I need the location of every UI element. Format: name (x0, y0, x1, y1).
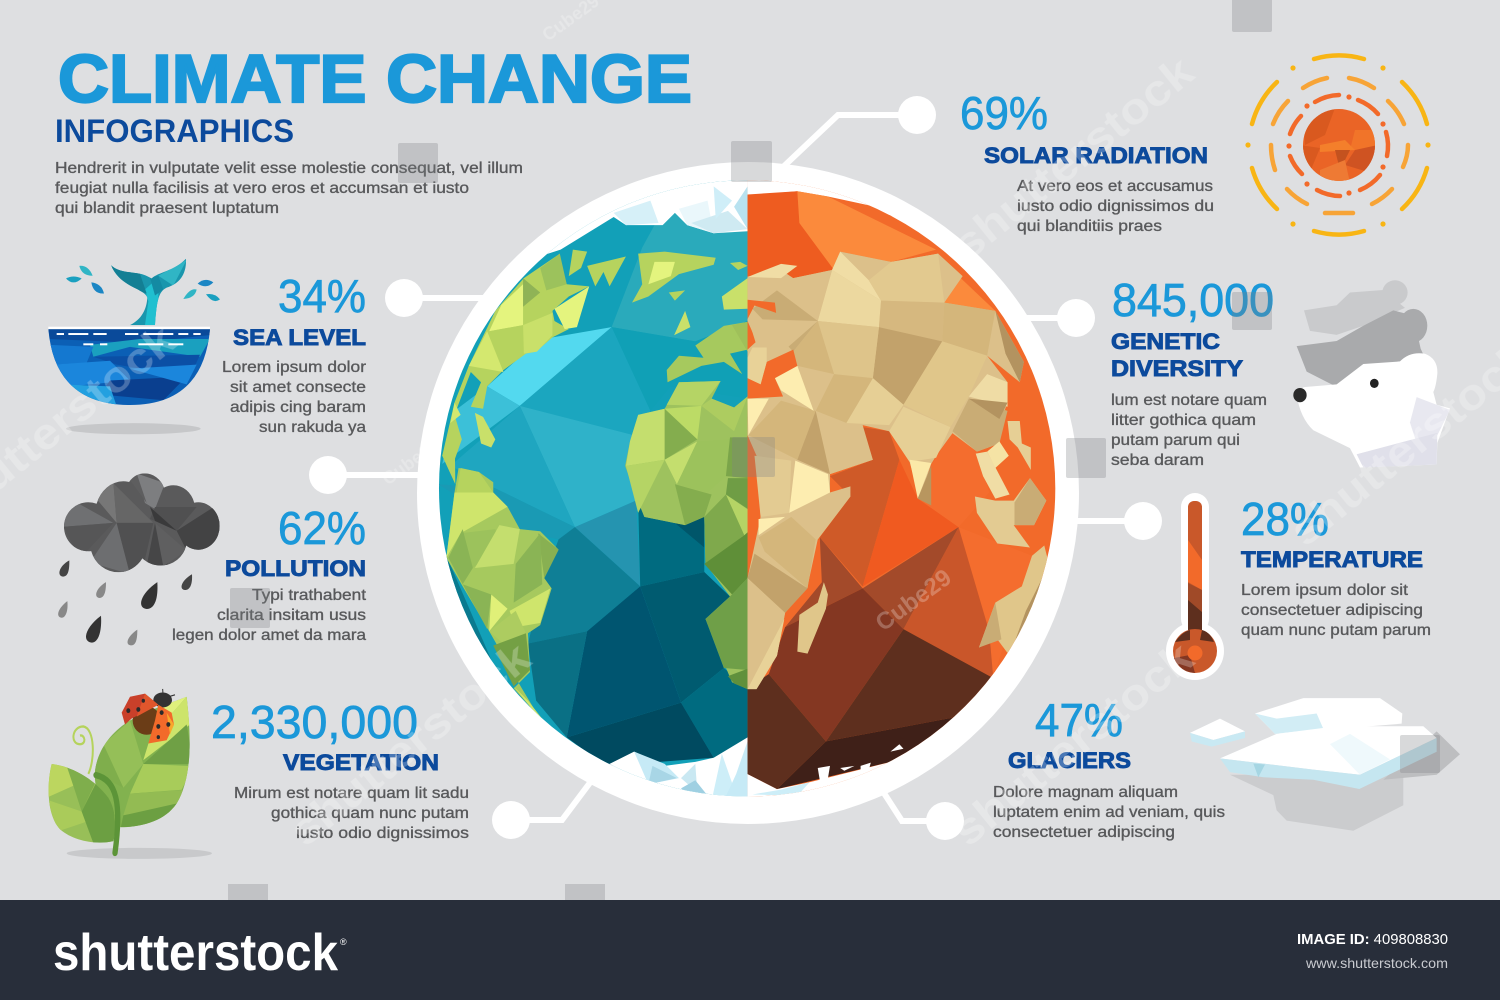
panel: sea level: adipis cing baram (230, 399, 366, 416)
watermarks: shutterstock (280, 632, 540, 856)
panel: glaciers: luptatem enim ad veniam, quis (993, 804, 1225, 821)
panel: genetic diversity: litter gothica quam (1111, 412, 1256, 429)
eurasia and africa tan half (748, 252, 1024, 689)
panel: vegetation: iusto odio dignissimos (296, 825, 469, 842)
japan (1008, 421, 1031, 470)
watermarks: Cube29 (379, 435, 443, 489)
title: CLIMATE CHANGE (58, 41, 692, 117)
panel: vegetation: 2,330,000 (211, 696, 418, 748)
icon: thermometer (1166, 493, 1224, 680)
panel: solar radiation: qui blanditiis praes (1017, 218, 1162, 235)
panel: genetic diversity: DIVERSITY (1111, 356, 1243, 381)
icon: ice floes (1190, 698, 1460, 831)
footer bar (0, 900, 1500, 1000)
leaf shadow (67, 848, 212, 859)
panel: pollution: POLLUTION (225, 556, 366, 581)
north america and greenland (442, 250, 626, 484)
panel: glaciers: consectetuer adipiscing (993, 824, 1175, 841)
panel: sea level: 34% (278, 270, 366, 322)
madagascar (797, 582, 828, 654)
panel: genetic diversity: GENETIC (1111, 329, 1220, 354)
panel: solar radiation: iusto odio dignissimos du (1017, 198, 1214, 215)
footer url: www.shutterstock.com (1305, 955, 1448, 971)
bottom ice cap (610, 738, 748, 796)
panel: sea level (222, 270, 367, 436)
watermarks: Cube29 (871, 564, 957, 637)
panel: temperature (1241, 493, 1431, 639)
footer logo: shutterstock (53, 924, 338, 982)
africa green half (625, 381, 761, 689)
panel: sea level: SEA LEVEL (233, 325, 366, 350)
panel: temperature: TEMPERATURE (1241, 547, 1423, 572)
southeast asia (975, 441, 1046, 548)
ladybug (122, 689, 175, 743)
panel: genetic diversity: putam parum qui (1111, 432, 1240, 449)
large leaf (94, 696, 190, 828)
watermark stamps (228, 0, 1440, 900)
watermarks: shutterstock (943, 46, 1203, 270)
panel: sea level: sun rakuda ya (259, 419, 366, 436)
waterline (48, 327, 210, 345)
sea bowl (47, 327, 213, 406)
intro text: feugiat nulla facilisis at vero eros et accumsan et iusto (55, 180, 469, 197)
stem (96, 775, 118, 853)
panel: solar radiation: 69% (960, 87, 1048, 139)
icon: leaves with ladybug (43, 689, 212, 859)
sun disc (1303, 109, 1375, 181)
panel: temperature: consectetuer adipiscing (1241, 602, 1423, 619)
panel: sea level: sit amet consecte (230, 379, 366, 396)
cloud (64, 473, 220, 572)
panel: solar radiation: SOLAR RADIATION (984, 143, 1208, 168)
panel: vegetation: gothica quam nunc putam (271, 805, 469, 822)
panel: pollution: legen dolor amet da mara (172, 627, 366, 644)
panel: sea level: Lorem ipsum dolor (222, 359, 367, 376)
intro text (55, 160, 523, 217)
registered mark: ® (340, 937, 347, 947)
water splashes (66, 266, 220, 301)
small leaf (48, 764, 115, 843)
icon: pollution cloud with rain (58, 467, 223, 645)
panel: glaciers: 47% (1035, 694, 1123, 746)
panel: genetic diversity: lum est notare quam (1111, 392, 1267, 409)
panel: vegetation: Mirum est notare quam lit sadu (234, 785, 469, 802)
icon: whale tail in sea bowl (47, 256, 220, 434)
panel: pollution: Typi trathabent (252, 587, 367, 604)
icon: sun (1245, 55, 1431, 235)
panel: genetic diversity (1111, 274, 1274, 469)
bowl shadow (66, 423, 201, 434)
europe (667, 278, 757, 382)
panel: pollution: clarita insitam usus (217, 607, 366, 624)
panel: pollution (172, 502, 367, 644)
intro text: qui blandit praesent luptatum (55, 200, 279, 217)
panel: vegetation: VEGETATION (283, 750, 439, 775)
subtitle: INFOGRAPHICS (55, 113, 294, 149)
panel: genetic diversity: seba daram (1111, 452, 1204, 469)
orange inlets (748, 300, 797, 435)
icon: polar bear (1293, 280, 1450, 468)
title block (55, 41, 692, 217)
intro text: Hendrerit in vulputate velit esse molestie consequat, vel illum (55, 160, 523, 177)
whale tail (111, 258, 186, 326)
globe (438, 180, 1056, 796)
top ice cap (546, 180, 748, 254)
australia (979, 546, 1052, 656)
ocean half (430, 170, 748, 823)
rain drops (58, 560, 192, 645)
orange half base (748, 180, 1056, 796)
panel: glaciers: Dolore magnam aliquam (993, 784, 1178, 801)
panel: pollution: 62% (278, 502, 366, 554)
image id: IMAGE ID: 409808830 (1297, 931, 1448, 948)
panel: glaciers (993, 694, 1225, 841)
panel: temperature: quam nunc putam parum (1241, 622, 1431, 639)
panel: vegetation (211, 696, 469, 842)
white globe ring (417, 162, 1079, 824)
panel: temperature: 28% (1241, 493, 1329, 545)
watermarks: shutterstock (943, 632, 1203, 856)
panel: glaciers: GLACIERS (1008, 748, 1131, 773)
panel: solar radiation: At vero eos et accusamus (1017, 178, 1213, 195)
tendril (73, 726, 93, 774)
arctic islands and iceland (632, 252, 748, 335)
panel: genetic diversity: 845,000 (1112, 274, 1274, 326)
connector lines and dots (309, 96, 1162, 840)
south america (446, 468, 559, 729)
outer sun rings (1252, 55, 1427, 235)
panel: temperature: Lorem ipsum dolor sit (1241, 582, 1409, 599)
panel: solar radiation (960, 87, 1214, 235)
